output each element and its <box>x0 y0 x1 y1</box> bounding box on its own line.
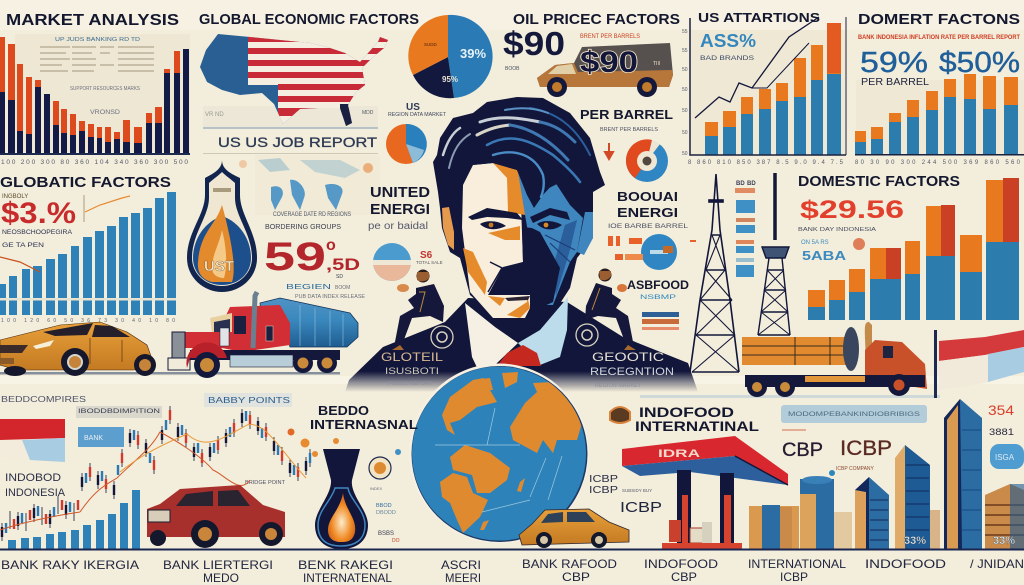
face: lit left side <box>462 163 530 318</box>
panel: US attractions chart: BAD BRANDS <box>700 55 755 62</box>
label: beddo international: INTERNASNAL <box>310 417 418 432</box>
hair highlights <box>443 108 590 197</box>
panel: oil price factors: BOOB <box>505 66 520 72</box>
labels: CBP and ICBP: SUBSIDY BUY <box>622 488 652 493</box>
vehicle: red tanker truck <box>168 292 358 378</box>
building 2 <box>800 476 852 549</box>
stat: percentages <box>860 47 1020 88</box>
figure: seated man left with badge: PUBLIC REPORT <box>388 381 433 387</box>
labels: CBP and ICBP <box>589 430 892 516</box>
label: indonesia: INDOBOD <box>5 472 61 484</box>
mouth <box>492 286 532 295</box>
stat: 59,50: ,5D <box>326 255 360 274</box>
heading: US attractions: US ATTARTIONS <box>698 10 820 25</box>
stat: percent <box>1 194 76 249</box>
panel: market analysis <box>0 12 190 166</box>
flag: Indonesia right <box>934 330 1024 398</box>
panel: oil price factors <box>503 11 696 330</box>
stat: 59,50: 59 <box>264 235 326 279</box>
mini bars <box>642 312 679 330</box>
chart: large pie <box>408 15 493 98</box>
stat: 59,50: SD <box>336 274 343 280</box>
heading: boouai energi <box>608 189 688 230</box>
icon: gas station <box>622 436 788 549</box>
stat: 59,50: PUB DATA INDEX RELEASE <box>295 294 366 300</box>
bottom labels: CBP <box>671 570 697 584</box>
globe <box>409 363 590 545</box>
stacked bar chart: 55 <box>682 48 688 54</box>
bottom labels: BENK RAKEGI <box>298 558 393 572</box>
cab <box>185 305 290 350</box>
small icons and notes beside bottle: DBODD <box>376 510 396 516</box>
stat: 59,50: BOOM <box>335 285 350 291</box>
icon: UST oil bottle: UST <box>204 258 234 275</box>
chart: small pie with band: S6 <box>420 250 433 261</box>
label: asbfood: NSBMP <box>640 295 676 301</box>
bar chart <box>855 74 1024 166</box>
icon: black bottle with flame <box>315 449 368 549</box>
mini legend tiles by towers: BD <box>747 181 756 187</box>
stacked bar chart <box>682 17 846 166</box>
bottom labels: ASCRI <box>441 558 481 572</box>
figure: seated man right with badge: RECEGNTION <box>590 366 674 378</box>
label: indonesia <box>5 472 66 499</box>
building 1 <box>749 505 799 549</box>
vehicle: orange car <box>0 322 156 376</box>
stat: ASS%: ASS% <box>700 31 756 51</box>
caption box under map: MDD <box>362 110 374 116</box>
panel: globatic factors <box>0 174 176 324</box>
exhaust stack <box>253 292 257 348</box>
labels: CBP and ICBP: ICBP <box>620 499 662 516</box>
stacked bar chart: 55 <box>682 29 688 35</box>
tiny red caption: BANK INDONESIA INFLATION RATE PER BARREL REPORT <box>858 35 1020 41</box>
stat: percentages: PER BARREL <box>861 77 929 88</box>
bottom labels: MEERI <box>445 571 481 585</box>
chart: large pie: 95% <box>442 75 458 84</box>
hair fringe over forehead <box>473 150 545 208</box>
trend lines <box>0 195 130 272</box>
table of faint text <box>40 37 154 116</box>
icon: gas station: IDRA <box>658 448 700 460</box>
figure: seated man right with badge <box>576 268 674 389</box>
table of faint text: UP JUDS BANKING RD TD <box>55 37 140 43</box>
labels: CBP and ICBP: ICBP COMPANY <box>836 466 875 472</box>
vehicle: van with $90: $90 <box>580 46 638 79</box>
tank <box>260 298 358 347</box>
table of faint text: SUPPORT RESOURCES MARKS <box>70 86 141 92</box>
stat: percentages: 59% <box>860 47 928 79</box>
chart labels: BRIDGE POINT <box>245 480 285 486</box>
mini legend tiles by towers <box>735 181 756 277</box>
candlestick chart <box>0 406 310 541</box>
stacked bar chart: 50 <box>682 130 688 136</box>
figure: seated man left with badge: ISUSBOTI <box>385 366 439 376</box>
chart: small US pie: REGION DATA MARKET <box>388 112 446 118</box>
table of faint text: VRONSD <box>90 110 121 116</box>
label: asbfood: ASBFOOD <box>627 278 689 292</box>
bottom labels: INTERNATENAL <box>303 571 392 585</box>
cheek crease <box>488 262 502 292</box>
label: asbfood <box>627 278 689 301</box>
portrait: main figure <box>345 97 698 392</box>
stat: percentages: $50% <box>939 47 1020 79</box>
small icons and notes beside bottle: BBOD <box>376 503 392 509</box>
panel: global economic factors <box>195 11 419 154</box>
heading: united energi: UNITED <box>370 184 430 201</box>
badge <box>576 324 598 346</box>
heading: market analysis: MARKET ANALYSIS <box>6 12 179 29</box>
baseline rule <box>0 548 1024 550</box>
figure: seated man right with badge: REGION MARKET <box>595 383 642 389</box>
stat: percent: NEOSBCHOOPEGIRA <box>2 229 73 236</box>
caption box under map: VR ND <box>205 112 224 118</box>
bottom labels: BANK LIERTERGI <box>163 558 273 572</box>
bar chart: blue <box>0 192 176 315</box>
building 5 <box>944 399 982 549</box>
labels: CBP and ICBP: CBP <box>782 440 823 461</box>
chart labels: BEDDCOMPIRES <box>1 395 86 404</box>
chart: small US pie: US <box>406 102 420 113</box>
map: blue world fragment <box>239 158 373 210</box>
chart: large pie: SUDD <box>424 42 438 47</box>
bottom labels <box>1 557 1024 585</box>
label box: blue: MODOMPEBANKINDIOBRIBIGS <box>788 412 920 418</box>
side stats <box>988 402 1024 469</box>
vehicle: van with $90 <box>537 43 673 97</box>
continents <box>440 372 582 533</box>
chart: donut <box>605 139 668 182</box>
chart: small pie with band: TOTAL SALE <box>416 260 443 265</box>
panel: oil price factors: BRENT PER BARRELS <box>580 34 640 40</box>
trend line <box>695 17 819 118</box>
panel: domestic factors lower: BANK DAY INDONESIA <box>798 227 876 233</box>
panel: domestic factors lower: ON 5A RS <box>801 240 829 246</box>
building 4 <box>895 445 940 549</box>
ears <box>442 207 454 250</box>
map: USA flag <box>200 34 388 126</box>
bottom labels: / JNIDAN <box>970 557 1024 571</box>
building 6 <box>985 484 1024 549</box>
label: indofood international <box>610 404 760 434</box>
face: blue right side <box>518 172 583 305</box>
building 3 <box>855 477 889 549</box>
vehicle: small orange car <box>519 509 629 548</box>
bottom labels: BANK RAKY IKERGIA <box>1 558 139 572</box>
eyes and brows <box>468 208 575 262</box>
chassis <box>190 350 340 360</box>
small icons and notes beside bottle: INDEX <box>370 486 383 491</box>
heading: boouai energi: ENERGI <box>617 205 678 220</box>
heading: per barrel: PER BARREL <box>580 107 673 122</box>
stacked bar chart: 50 <box>682 67 688 73</box>
chart labels: IBODDBDIMPITION <box>78 409 160 415</box>
labels: CBP and ICBP: ICBP <box>589 485 618 496</box>
small icons and notes beside bottle: DO <box>392 538 400 544</box>
panel: domestic factors lower: 5ABA <box>802 248 847 263</box>
heading: globatic factors: GLOBATIC FACTORS <box>0 174 171 191</box>
bottom labels: ICBP <box>780 570 808 584</box>
suit jacket <box>345 298 698 392</box>
panel: oil price factors: BRENT PER BARRELS <box>600 127 658 133</box>
icon: UST oil bottle <box>187 160 257 292</box>
label: indofood international: INTERNATINAL <box>635 418 760 434</box>
bar chart: red and navy <box>0 37 190 166</box>
label: beddo international <box>310 403 418 432</box>
stat: 59,50: o <box>326 237 336 254</box>
bar chart <box>808 178 1019 320</box>
heading: domert factons: DOMERT FACTONS <box>858 11 1020 28</box>
label: indonesia: INDONESIA <box>5 487 66 499</box>
small icons and notes beside bottle: BSBS <box>378 531 394 537</box>
bar chart: red and navy: 100 200 300 80 360 104 340 360 300 500 <box>1 159 188 166</box>
stat: $29.56: $29.56 <box>800 196 904 224</box>
stat: 59,50 <box>264 212 366 300</box>
heading: united energi <box>368 184 430 232</box>
caption box under map <box>203 106 378 129</box>
panel: globatic factors: 100 120 60 50 36 73 30 40 10 80 <box>1 318 175 324</box>
panel: stock chart section <box>0 393 310 549</box>
panel: city skyline: 33% <box>993 535 1015 547</box>
chart: small US pie <box>386 102 446 164</box>
stat labels: 33% <box>904 535 926 547</box>
stat: 59,50: BORDERING GROUPS <box>265 224 341 231</box>
stat: percent: GE TA PEN <box>2 242 44 249</box>
stacked bar chart: 50 <box>682 87 688 93</box>
chart labels <box>1 393 292 486</box>
panel: city skyline <box>749 399 1024 549</box>
stacked bar chart: 8 860 810 850 387 8.5 9.0 9.4 7.5 <box>688 160 844 166</box>
chart: large pie: 39% <box>460 46 486 61</box>
flag: Indonesia left <box>0 419 65 462</box>
stacked bar chart: 50 <box>682 151 688 157</box>
side stats: ISGA <box>995 453 1015 462</box>
head and hair <box>433 97 605 325</box>
bottom labels: INTERNATIONAL <box>748 557 846 571</box>
mini legend tiles by towers: BD <box>736 181 745 187</box>
bottom labels: MEDO <box>203 571 239 585</box>
heading: global economic factors: GLOBAL ECONOMIC FACTORS <box>199 11 419 28</box>
heading: oil price factors: OIL PRICEC FACTORS <box>513 11 680 28</box>
stacked bar chart: 50 <box>682 108 688 114</box>
stat: percent: INGBOLY <box>2 194 28 200</box>
bottom labels: BANK RAFOOD <box>522 557 617 571</box>
bar chart: 80 30 90 300 244 500 369 860 560 <box>855 160 1021 166</box>
heading: US job report: US US JOB REPORT <box>218 134 378 150</box>
heading: boouai energi: BOOUAI <box>617 189 678 204</box>
label box: blue <box>781 405 927 423</box>
stat: 59,50: COVERAGE DATE RD REGIONS <box>273 212 351 218</box>
side stats: 354 <box>988 402 1014 418</box>
chart labels: BANK <box>84 435 103 442</box>
panel: domestic factors lower <box>798 174 1019 320</box>
shirt and tie <box>465 297 568 378</box>
panel: domestic factors top <box>855 11 1024 166</box>
nose shadow <box>503 227 560 308</box>
chart: small pie with band <box>373 243 443 281</box>
heading: boouai energi: IOE BARBE BARREL <box>608 223 688 230</box>
heading: united energi: ENERGI <box>370 201 430 218</box>
stat: $90: $90 <box>503 25 565 62</box>
tower left <box>690 174 739 372</box>
bar chart: bottom blue <box>8 490 140 549</box>
stat: 59,50: BEGIEN <box>286 284 331 291</box>
stat: percent: $3.% <box>1 197 76 230</box>
figure: seated man left with badge: GLOTEIL <box>381 350 443 364</box>
badge <box>431 326 453 348</box>
heading: domestic factors: DOMESTIC FACTORS <box>798 174 960 190</box>
heading: united energi: pe or baidal <box>368 221 428 232</box>
small icons and notes beside bottle <box>288 428 401 544</box>
panel: US attractions chart <box>682 10 846 166</box>
chart: blue circle with bars <box>608 234 696 270</box>
labels: CBP and ICBP: ICBP <box>840 437 892 460</box>
figure: seated man right with badge: GEOOTIC <box>592 350 664 364</box>
bottom labels: CBP <box>562 570 590 584</box>
chart labels: BABBY POINTS <box>208 396 290 405</box>
orange shadows <box>463 163 530 318</box>
label: beddo international: BEDDO <box>318 403 369 418</box>
vehicle: orange flatbed truck <box>742 322 927 397</box>
vehicle: red pickup <box>147 485 285 548</box>
bottom labels: INDOFOOD <box>865 557 946 571</box>
labels: CBP and ICBP: ICBP <box>589 474 618 485</box>
label: indofood international: INDOFOOD <box>639 404 734 420</box>
bottom labels: INDOFOOD <box>644 557 718 571</box>
vehicle: van with $90: TIII <box>653 61 660 67</box>
tower right <box>758 173 790 335</box>
icon: transmission towers <box>690 173 790 372</box>
figure: seated man left with badge <box>381 270 453 387</box>
side stats: 3881 <box>989 427 1014 437</box>
